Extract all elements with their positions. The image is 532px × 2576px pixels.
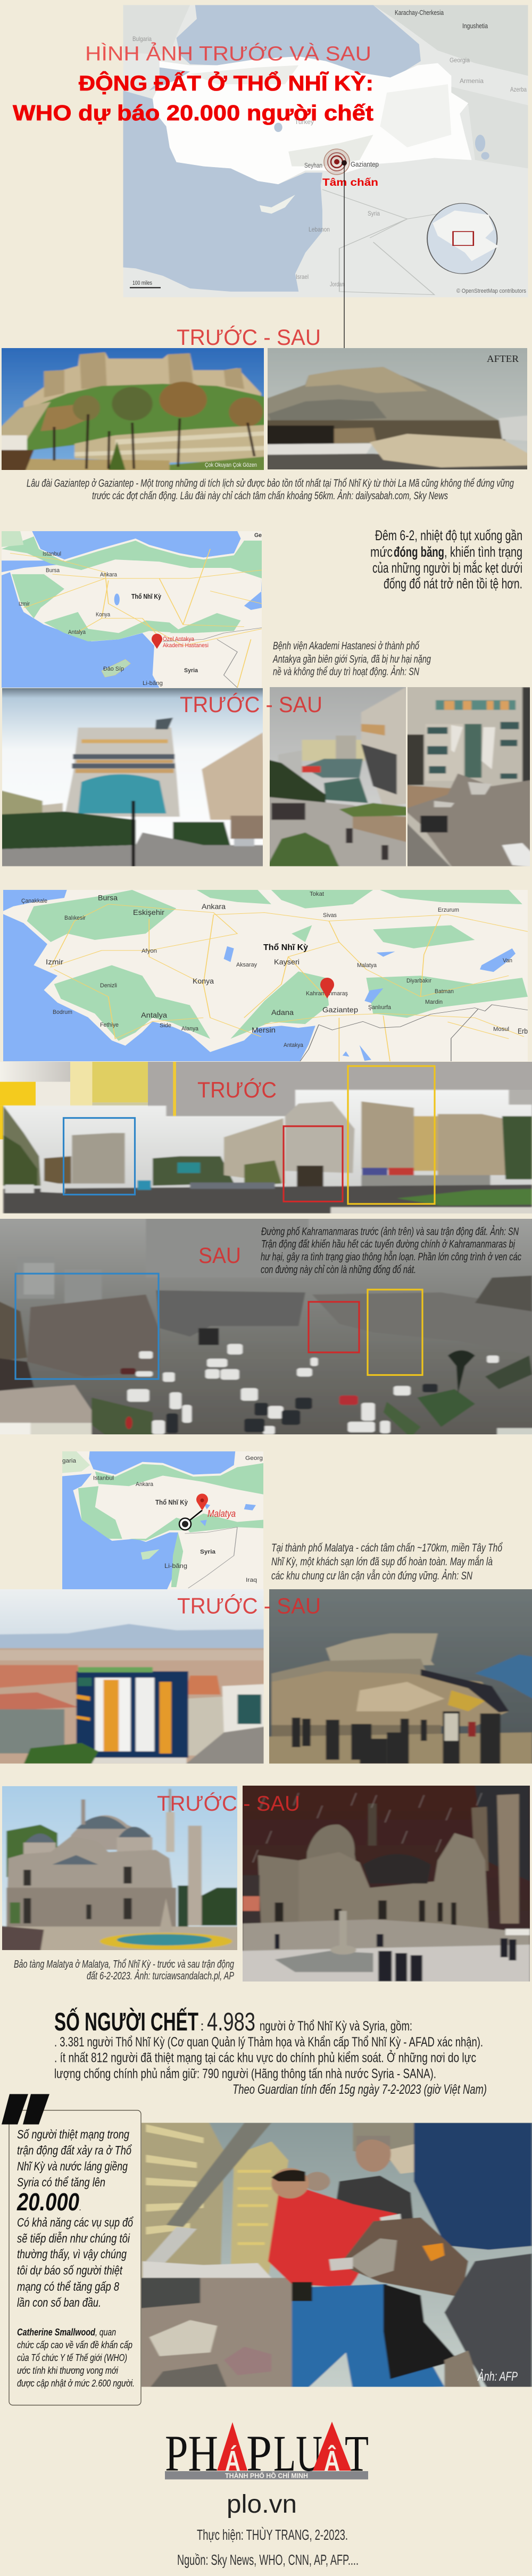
- text: quote: thường thấy, vì vậy chúng: [17, 2247, 127, 2261]
- map labels: Konya: [193, 977, 214, 985]
- map labels: Istanbul: [43, 551, 61, 557]
- map labels: Armenia: [460, 77, 484, 85]
- map labels: [21, 891, 528, 1048]
- map labels: Adana: [271, 1008, 294, 1017]
- number: total deaths: 4.983: [207, 2008, 255, 2036]
- connector line from epicenter to castle: [344, 163, 345, 351]
- map labels: Afyon: [142, 948, 157, 954]
- cars: [127, 1344, 499, 1434]
- map labels: Balıkesir: [64, 915, 86, 921]
- panel: Kahramanmaras map: [0, 887, 532, 1064]
- map labels: Georg: [245, 1455, 263, 1462]
- map labels: Seyhan: [304, 161, 322, 169]
- text: death toll details: [54, 2019, 487, 2097]
- text: quote: [16, 2127, 134, 2309]
- map labels: Side: [160, 1022, 171, 1029]
- map labels: Malatya: [357, 962, 377, 969]
- logo wordmark: P: [246, 2425, 272, 2482]
- aerial street artwork: [0, 1219, 532, 1434]
- map labels: Izmir: [46, 957, 63, 966]
- map labels: Gaziantep: [351, 160, 379, 168]
- heading: before after hotel: TRƯỚC - SAU: [177, 1594, 321, 1618]
- map labels: Istanbul: [93, 1475, 114, 1482]
- map labels: Syria: [200, 1549, 216, 1555]
- heading: before: TRƯỚC: [197, 1077, 277, 1102]
- logo subtitle bar: THÀNH PHỐ HỒ CHÍ MINH: [225, 2472, 308, 2480]
- map labels: Mosul: [493, 1026, 509, 1033]
- map labels: [132, 9, 527, 294]
- map labels: Ge: [254, 532, 262, 539]
- separator colon: :: [200, 2019, 204, 2034]
- map labels: Bodrum: [53, 1009, 72, 1015]
- logo wordmark: PH: [165, 2425, 218, 2482]
- panel: Antakya map: [0, 530, 264, 690]
- panel: street after: [0, 1215, 532, 1440]
- icon: epicenter rings: [324, 149, 350, 175]
- scale bar: [130, 287, 161, 288]
- map labels: Mardin: [425, 999, 443, 1005]
- icon: map pin: [320, 978, 334, 998]
- map labels: Izmir: [19, 601, 30, 607]
- map labels: Diyarbakır: [406, 978, 431, 984]
- map labels: Turkey: [295, 118, 314, 126]
- logo wordmark: [165, 2425, 369, 2482]
- text: quote attribution: Catherine Smallwood: [17, 2327, 96, 2338]
- street panorama artwork: [0, 1062, 532, 1213]
- map artwork: [123, 5, 528, 297]
- map labels: Thổ Nhĩ Kỳ: [263, 943, 308, 952]
- map labels: Ankara: [136, 1481, 154, 1488]
- logo: Pháp Luật: [165, 2422, 369, 2482]
- heading: before after hospital: TRƯỚC - SAU: [180, 692, 322, 717]
- map artwork: [3, 890, 528, 1061]
- map labels: Georgia: [450, 56, 470, 64]
- map labels: Bulgaria: [132, 35, 152, 43]
- caption: mosque: [14, 1959, 234, 1982]
- text: quote attribution: ước tính khi thương vong mới: [17, 2365, 119, 2376]
- icon: quotation mark: [2, 2094, 49, 2125]
- icon: map pin: [152, 634, 162, 649]
- map labels: Thổ Nhĩ Kỳ: [131, 592, 162, 600]
- logo wordmark: T: [345, 2425, 369, 2482]
- text: quote: .: [79, 2203, 81, 2212]
- caption: mosque: đất 6-2-2023. Ảnh: turciawsandalach.pl, AP: [87, 1969, 234, 1982]
- panel: death toll: [54, 2007, 487, 2097]
- map labels: Çanakkale: [21, 898, 47, 904]
- map labels: Fethiye: [100, 1022, 119, 1028]
- logo red letter A one: Á: [225, 2445, 240, 2477]
- map labels: Iraq: [246, 1577, 257, 1583]
- label: epicenter: Tâm chấn: [322, 177, 378, 188]
- caption: Malatya: [271, 1542, 503, 1582]
- map labels: Gaziantep: [322, 1005, 358, 1014]
- photo: mosque after: [243, 1786, 530, 1981]
- panel: street before: [0, 1062, 532, 1215]
- heading: before after castle: TRƯỚC - SAU: [177, 325, 321, 350]
- text: quote attribution: được cập nhật ở mức 2.600 người.: [17, 2378, 135, 2389]
- panel: Malatya map: [58, 1448, 268, 1591]
- caption: mosque: Bảo tàng Malatya ở Malatya, Thổ Nhĩ Kỳ - trước và sau trận động: [14, 1959, 234, 1970]
- text: website: plo.vn: [227, 2490, 297, 2519]
- text: credits: Thực hiện: THÙY TRANG, 2-2023.: [197, 2527, 348, 2543]
- photo: mosque before: [2, 1786, 237, 1950]
- label: after: AFTER: [487, 353, 519, 364]
- heading: after: SAU: [198, 1243, 241, 1268]
- logo subtitle bar: [165, 2471, 368, 2480]
- map labels: Syria: [368, 210, 380, 217]
- map labels: Israel: [296, 273, 309, 280]
- text: quote attribution: , quan: [95, 2327, 116, 2338]
- icon: epicenter marker: [179, 1518, 191, 1530]
- map labels: Syria: [184, 667, 198, 674]
- map labels: Van: [503, 957, 512, 964]
- map labels: Lebanon: [309, 226, 330, 233]
- map labels: [19, 532, 262, 687]
- map labels: Li-băng: [143, 680, 163, 687]
- map labels: garia: [62, 1458, 77, 1464]
- map labels: Antalya: [141, 1011, 167, 1019]
- text: quote: mạng có thể tăng gấp 8: [17, 2280, 119, 2293]
- map labels: Tokat: [310, 891, 324, 897]
- highlight frames: [15, 1274, 422, 1379]
- text: quote: Syria có thể tăng lên: [17, 2175, 105, 2189]
- map artwork: [2, 531, 262, 688]
- map labels: Li-băng: [164, 1562, 187, 1570]
- map labels: Erb: [518, 1027, 528, 1035]
- heading: before after mosque: TRƯỚC - SAU: [157, 1791, 300, 1815]
- map labels: Thổ Nhĩ Kỳ: [155, 1498, 188, 1506]
- map labels: Kayseri: [274, 957, 300, 966]
- text: freezing temperature note: [370, 527, 522, 592]
- photo: Gaziantep castle after: [268, 348, 527, 469]
- map labels: [62, 1455, 263, 1583]
- text: credits: Nguồn: Sky News, WHO, CNN, AP, AFP....: [177, 2552, 359, 2568]
- map labels: Ankara: [202, 902, 226, 911]
- caption: street: [261, 1225, 521, 1276]
- map labels: Aksaray: [236, 962, 257, 968]
- text: credits: [177, 2527, 359, 2568]
- caption: street: con đường này chỉ còn là những đống đổ nát.: [261, 1264, 416, 1276]
- text: freezing temperature note: mức: [370, 544, 393, 560]
- map labels: Jordan: [330, 280, 344, 288]
- map labels: Denizli: [100, 982, 117, 989]
- headline line one: ĐỘNG ĐẤT Ở THỔ NHĨ KỲ:: [79, 70, 373, 95]
- panel: hero earthquake map: [123, 5, 528, 297]
- icon: Malatya pin: [196, 1493, 208, 1510]
- text: quote: sẽ tiếp diễn như chúng tôi: [17, 2231, 130, 2245]
- map labels: Şanlıurfa: [368, 1004, 392, 1011]
- map labels: Özel Antakya: [163, 636, 195, 642]
- map labels: Sivas: [323, 912, 337, 919]
- photo: hospital after wide: [270, 687, 406, 866]
- text: quote: 20.000: [16, 2188, 79, 2216]
- map labels: Bursa: [46, 567, 60, 574]
- map labels: 100 miles: [132, 280, 152, 286]
- logo red letter A two: Â: [324, 2445, 340, 2477]
- photo: rescue: [142, 2123, 532, 2387]
- logo red letter A one: [217, 2422, 247, 2477]
- text: quote attribution: chức cấp cao về vấn đề khẩn cấp: [17, 2340, 132, 2350]
- text: quote: Số người thiệt mạng trong: [17, 2127, 129, 2141]
- panel: WHO quote: [2, 2094, 141, 2405]
- caption: castle: [27, 478, 514, 502]
- map labels: Antalya: [68, 629, 86, 635]
- map labels: Konya: [96, 612, 111, 618]
- map labels: Mersin: [252, 1026, 276, 1034]
- map labels: Bursa: [98, 893, 118, 902]
- map labels: Antakya: [284, 1042, 304, 1048]
- caption: hospital: Antakya gần biên giới Syria, đã bị hư hại nặng: [272, 654, 431, 665]
- map labels: Karachay-Cherkesia: [395, 9, 444, 16]
- headline line two: WHO dự báo 20.000 người chết: [13, 101, 373, 125]
- map labels: Azerba: [510, 86, 527, 93]
- kicker: HÌNH ẢNH TRƯỚC VÀ SAU: [85, 42, 371, 65]
- caption: hospital: nề và không thể duy trì hoạt động. Ảnh: SN: [273, 665, 419, 678]
- logo wordmark: LU: [273, 2425, 322, 2482]
- map labels: Erzurum: [438, 907, 459, 913]
- caption: hospital: Bệnh viện Akademi Hastanesi ở thành phố: [273, 640, 420, 652]
- map labels: Malatya: [207, 1508, 236, 1519]
- map labels: Batman: [435, 988, 454, 995]
- map labels: Ankara: [100, 572, 118, 578]
- photo: hospital after closeup: [408, 687, 530, 866]
- text: quote: Nhĩ Kỳ và nước láng giềng: [17, 2159, 128, 2173]
- text: quote: lần con số ban đầu.: [17, 2296, 101, 2309]
- text: quote: Có khả năng các vụ sụp đổ: [17, 2215, 134, 2229]
- text: quote attribution: [17, 2327, 135, 2389]
- map labels: Ingushetia: [462, 22, 488, 30]
- title: [13, 42, 373, 125]
- photo: hospital before: [2, 688, 263, 866]
- text: quote attribution: của Tổ chức Y tế Thế giới (WHO): [17, 2352, 127, 2363]
- text: death toll details: người ở Thổ Nhĩ Kỳ và Syria, gồm:: [260, 2019, 412, 2034]
- photo credit on castle photo: Çok Okuyan Çok Gözen: [205, 462, 257, 468]
- highlight frames: [64, 1066, 435, 1204]
- text: quote: tôi dự báo số người thiệt: [17, 2263, 123, 2277]
- map labels: Eskişehir: [133, 908, 164, 917]
- photo: hotel before: [0, 1589, 264, 1764]
- map labels: Akademi Hastanesi: [163, 642, 209, 649]
- text: quote: trận động đất xảy ra ở Thổ: [17, 2143, 132, 2157]
- caption: hospital: [272, 640, 431, 678]
- map labels: Kahramanmaraş: [306, 990, 348, 997]
- logo red letter A two: [313, 2422, 351, 2477]
- map artwork: [62, 1451, 263, 1589]
- text: freezing temperature note: đóng băng: [394, 544, 444, 560]
- photo credit: rescue: Ảnh: AFP: [477, 2368, 518, 2384]
- heading: death toll: SỐ NGƯỜI CHẾT: [54, 2007, 198, 2036]
- photo: hotel after: [269, 1589, 532, 1764]
- quote box: [9, 2110, 141, 2405]
- map labels: Đảo Síp: [103, 666, 124, 672]
- map labels: Alanya: [181, 1026, 199, 1032]
- photo: Gaziantep castle before: [2, 348, 264, 470]
